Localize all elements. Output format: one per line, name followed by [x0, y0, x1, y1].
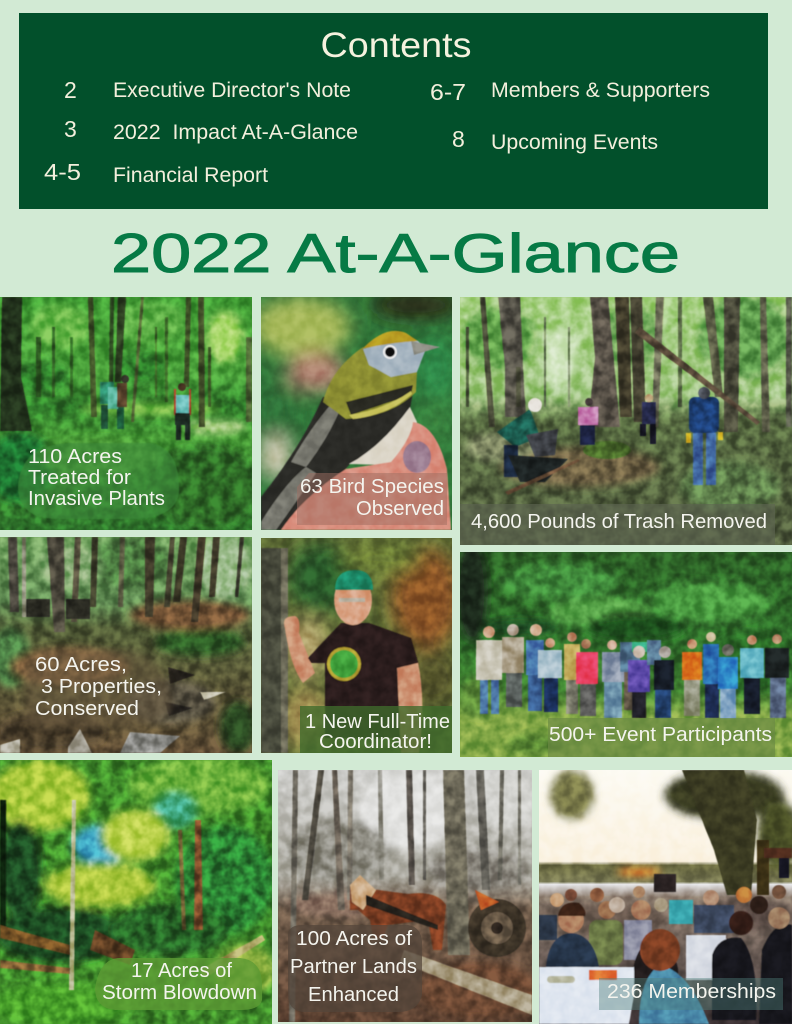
person in blue hoodie	[686, 387, 723, 485]
caption: 110 acres	[18, 443, 179, 519]
contents entry: pages 4-5: 4-5	[44, 159, 81, 185]
photo: horse logging team	[278, 770, 532, 1022]
person in navy	[640, 394, 656, 444]
caption: new coordinator: Coordinator!	[319, 731, 432, 753]
tree trunks	[0, 297, 252, 431]
photo: new coordinator	[261, 538, 452, 753]
contents entry: pages 6-7	[430, 79, 710, 105]
caption: 100 acres: Enhanced	[308, 984, 399, 1006]
dinner guests	[539, 885, 792, 1024]
caption: 4,600 pounds: 4,600 Pounds of Trash Removed	[471, 511, 767, 533]
caption: new coordinator: 1 New Full-Time	[305, 711, 450, 733]
horse and cart	[350, 875, 526, 957]
contents entry: page 8	[452, 126, 658, 154]
caption: new coordinator	[300, 706, 452, 753]
photo: forest stream	[0, 537, 252, 753]
group of people	[476, 624, 789, 719]
contents entry: pages 4-5	[44, 159, 268, 187]
caption: 60 acres	[25, 650, 172, 727]
panel: contents	[19, 13, 768, 209]
contents entry: pages 6-7: Members & Supporters	[491, 79, 710, 102]
tree trunks	[8, 537, 244, 632]
caption: 100 acres: 100 Acres of	[296, 928, 412, 950]
caption: 110 acres: Treated for	[28, 467, 131, 489]
caption: 100 acres: Partner Lands	[290, 956, 417, 978]
photo: volunteers removing trash	[460, 297, 792, 545]
bare trees	[289, 770, 521, 1022]
caption: 17 acres	[95, 958, 262, 1010]
hand	[281, 422, 451, 530]
photo: hikers in green forest	[0, 297, 252, 530]
man	[284, 570, 422, 753]
bird	[261, 331, 440, 530]
caption: 63 bird species	[297, 473, 447, 525]
caption: 4,600 pounds	[460, 504, 775, 545]
photo: storm blowdown forest	[0, 760, 272, 1024]
contents entry: page 3	[64, 116, 358, 144]
photo: warbler held in a hand	[261, 297, 452, 530]
contents entry: page 3: 3	[64, 116, 77, 142]
contents entry: pages 4-5: Financial Report	[113, 164, 268, 187]
caption: 63 bird species: 63 Bird Species	[300, 476, 444, 498]
moss rock	[583, 441, 631, 459]
title: 2022 At-A-Glance: 2022 At-A-Glance	[111, 222, 680, 284]
caption: 110 acres: 110 Acres	[28, 446, 122, 468]
caption: 60 acres: 3 Properties,	[41, 676, 162, 698]
caption: 17 acres: 17 Acres of	[131, 960, 232, 982]
caption: 60 acres: Conserved	[35, 698, 139, 720]
caption: 500+ participants: 500+ Event Participants	[549, 724, 772, 746]
fence post	[261, 548, 288, 753]
oak tree	[654, 770, 792, 895]
stream rocks	[0, 667, 226, 753]
caption: 236 memberships	[599, 978, 783, 1010]
background crowd	[539, 885, 786, 965]
contents entry: page 8: Upcoming Events	[491, 131, 658, 154]
caption: 63 bird species: Observed	[356, 498, 444, 520]
tree trunks	[466, 297, 792, 432]
caption: 236 memberships: 236 Memberships	[607, 981, 776, 1003]
caption: 17 acres: Storm Blowdown	[102, 982, 257, 1004]
contents entry: page 3: 2022 Impact At-A-Glance	[113, 121, 358, 144]
photo: member dinner at sunset	[539, 770, 792, 1024]
caption: 100 acres	[288, 925, 422, 1012]
contents entry: page 2: Executive Director's Note	[113, 79, 351, 102]
trunks and fallen logs	[0, 800, 265, 990]
heading: Contents: Contents	[320, 26, 472, 65]
person in pink	[578, 398, 598, 445]
person with wheelbarrow	[497, 398, 580, 495]
contents entry: page 2: 2	[64, 77, 77, 103]
photo: volunteer group	[460, 552, 792, 757]
caption: 110 acres: Invasive Plants	[28, 488, 165, 510]
fallen log	[400, 950, 532, 1015]
contents entry: page 8: 8	[452, 126, 465, 152]
caption: 60 acres: 60 Acres,	[35, 654, 127, 676]
hikers	[100, 375, 191, 440]
caption: 500+ participants	[548, 718, 775, 757]
contents entry: pages 6-7: 6-7	[430, 79, 466, 105]
